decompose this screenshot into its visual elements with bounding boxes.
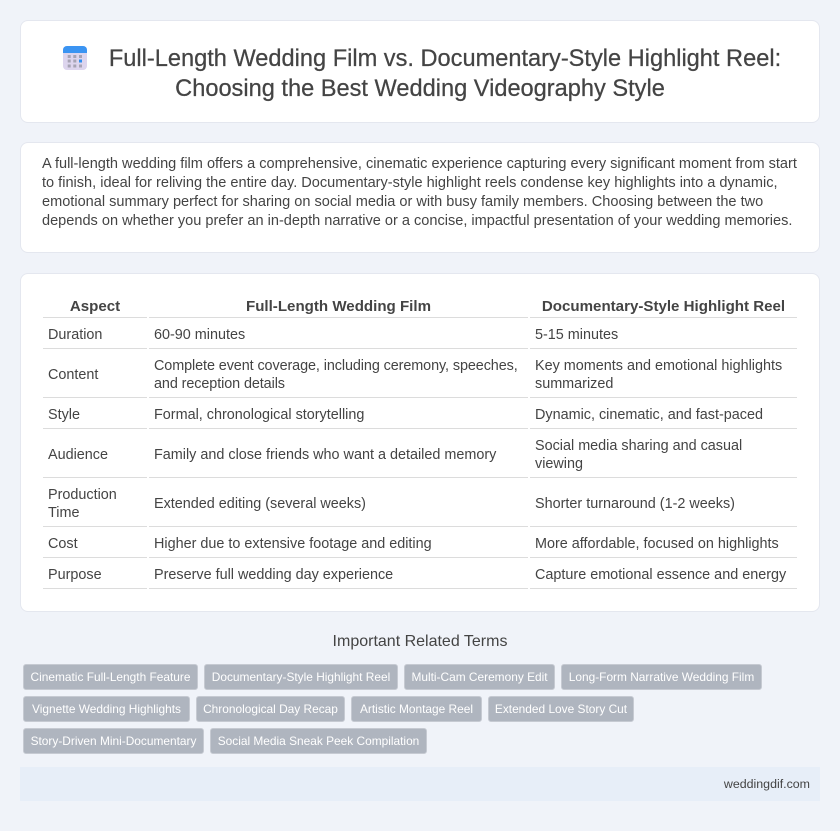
table header (70, 298, 785, 315)
text block: introduction: depends on whether you prefer an in-depth narrative or a concise, impactful presentation of your wedding memories. (42, 213, 792, 229)
table header: Documentary-Style Highlight Reel (542, 298, 785, 315)
row: style: Formal, chronological storytelling (154, 407, 364, 423)
row: cost: Cost (48, 536, 78, 552)
text block: introduction: emotional summary perfect for sharing on social media or with busy family members. Choosing between the two (42, 194, 763, 210)
tags: related terms: Story-Driven Mini-Documentary (31, 734, 196, 748)
tags: related terms: Long-Form Narrative Wedding Film (569, 670, 754, 684)
text block: introduction (42, 156, 797, 229)
footer bar (20, 767, 820, 801)
icon: calendar (63, 46, 87, 70)
row: audience (48, 438, 742, 472)
title: Choosing the Best Wedding Videography Style (175, 76, 665, 102)
row: cost: More affordable, focused on highlights (535, 536, 779, 552)
row: content: summarized (535, 376, 613, 392)
row: duration: 5-15 minutes (535, 327, 618, 343)
text block: introduction: to finish, ideal for reliving the entire day. Documentary-style highlight reels condense key highlights into a dynamic, (42, 175, 778, 191)
row: cost (48, 536, 779, 552)
row: production time: Extended editing (several weeks) (154, 496, 366, 512)
row: purpose: Purpose (48, 567, 102, 583)
tags: related terms: Social Media Sneak Peek Compilation (218, 734, 419, 748)
row: style (48, 407, 763, 423)
row: audience: Audience (48, 447, 108, 463)
table header: Full-Length Wedding Film (246, 298, 431, 315)
row: audience: Social media sharing and casual (535, 438, 742, 454)
tags: related terms: Chronological Day Recap (203, 702, 338, 716)
row: purpose (48, 567, 786, 583)
tags: related terms: Artistic Montage Reel (360, 702, 473, 716)
tags: related terms: Multi-Cam Ceremony Edit (411, 670, 548, 684)
row: content: Key moments and emotional highlights (535, 358, 782, 374)
title: Full-Length Wedding Film vs. Documentary-Style Highlight Reel: (109, 46, 781, 72)
row: cost: Higher due to extensive footage and editing (154, 536, 432, 552)
row: style: Dynamic, cinematic, and fast-paced (535, 407, 763, 423)
row: style: Style (48, 407, 80, 423)
panel: title header (20, 20, 820, 123)
row: duration: Duration (48, 327, 102, 343)
row: audience: Family and close friends who want a detailed memory (154, 447, 496, 463)
row: production time: Shorter turnaround (1-2 weeks) (535, 496, 735, 512)
row: production time: Production (48, 487, 117, 503)
tags: related terms: Documentary-Style Highlight Reel (212, 670, 390, 684)
row: purpose: Preserve full wedding day experience (154, 567, 393, 583)
tags: related terms: Vignette Wedding Highlights (32, 702, 181, 716)
row: audience: viewing (535, 456, 583, 472)
tags: related terms: Extended Love Story Cut (495, 702, 627, 716)
row: purpose: Capture emotional essence and energy (535, 567, 786, 583)
row: duration (48, 327, 618, 343)
tags: related terms: Cinematic Full-Length Feature (31, 670, 190, 684)
table header: Aspect (70, 298, 120, 315)
row: duration: 60-90 minutes (154, 327, 245, 343)
title (109, 46, 781, 102)
panel: introduction (20, 142, 820, 253)
row: content: and reception details (154, 376, 285, 392)
row: production time (48, 487, 735, 521)
row: content: Content (48, 367, 98, 383)
panel: comparison table (20, 273, 820, 612)
text block: introduction: A full-length wedding film offers a comprehensive, cinematic experience capturing every significant moment from start (42, 156, 797, 172)
footer: site name: weddingdif.com (724, 777, 810, 791)
row: content (48, 358, 782, 392)
heading: important related terms: Important Related Terms (333, 633, 507, 650)
row: content: Complete event coverage, including ceremony, speeches, (154, 358, 518, 374)
row: production time: Time (48, 505, 79, 521)
